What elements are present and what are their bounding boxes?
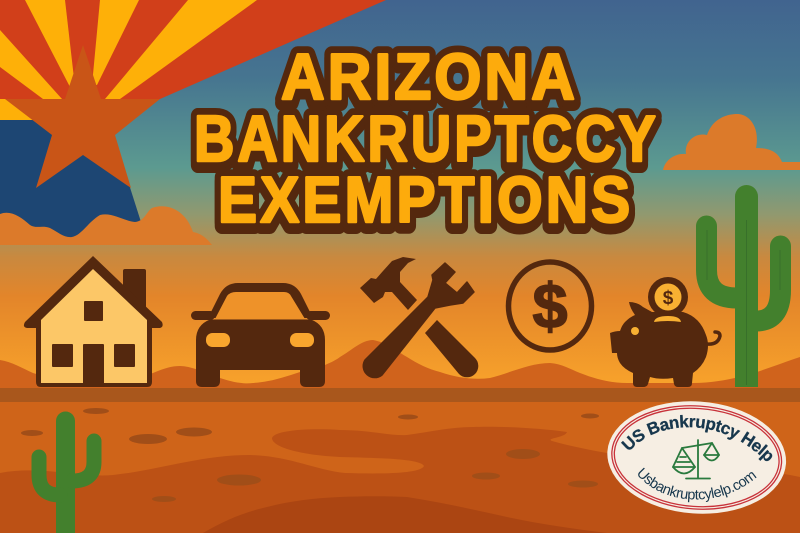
flag lower yellow — [0, 99, 50, 121]
title outline: ARIZONA — [281, 45, 575, 117]
flag star — [5, 45, 160, 188]
badge heading: US Bankruptcy Help — [621, 414, 772, 462]
Arizona flag — [0, 0, 386, 240]
piggy body — [610, 302, 708, 387]
ground — [0, 388, 800, 533]
flag rays — [0, 0, 386, 99]
title fill: ARIZONA — [281, 41, 575, 113]
small cactus — [39, 421, 94, 533]
badge url: Usbankruptcylelp.com — [638, 468, 756, 502]
distant mountains — [0, 340, 800, 392]
title outline: ARIZONA — [281, 41, 575, 113]
icon: scales — [673, 440, 719, 478]
piggy coin: $ — [663, 288, 674, 309]
left cloud — [0, 206, 212, 245]
icon: hammer and wrench — [360, 257, 478, 378]
title fill: BANKRUPTCCY — [194, 102, 656, 175]
title fill: EXEMPTIONS — [218, 164, 630, 237]
title outline: BANKRUPTCCY — [194, 102, 656, 175]
right cloud — [663, 114, 800, 170]
big cactus — [706, 185, 780, 387]
icon: dollar coin: $ — [532, 272, 568, 342]
flag blue field — [0, 120, 141, 240]
title — [194, 41, 656, 241]
sky background — [0, 0, 800, 390]
title fill — [194, 41, 656, 237]
title outline: BANKRUPTCCY — [194, 106, 656, 179]
icon: house — [24, 256, 163, 387]
piggy tail — [707, 332, 720, 344]
title outline: EXEMPTIONS — [218, 168, 630, 241]
icon: dollar coin — [508, 262, 592, 350]
ground stones — [21, 408, 599, 502]
title outline: EXEMPTIONS — [218, 164, 630, 237]
badge: US Bankruptcy Help — [607, 401, 786, 514]
icon: piggy bank — [610, 277, 720, 387]
title outline — [194, 41, 656, 241]
icon: car — [191, 283, 330, 387]
